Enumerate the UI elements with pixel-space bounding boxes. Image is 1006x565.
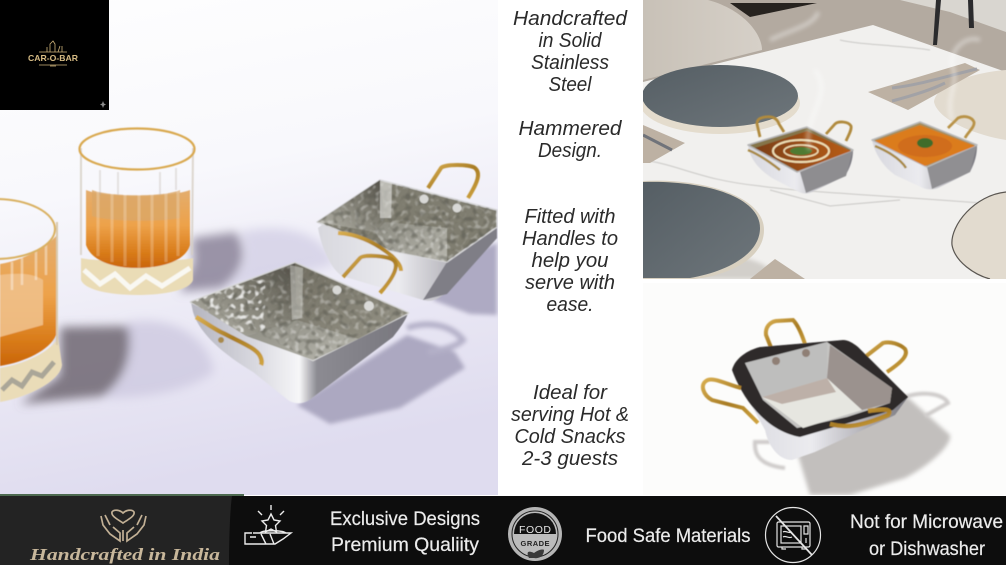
panel: feature text column [498, 0, 643, 496]
plate: cream right [952, 192, 1006, 279]
feature: ideal for serving: 2-3 guests [521, 447, 618, 470]
logo badge [0, 0, 109, 110]
text: food safe materials: Food Safe Materials [586, 525, 751, 547]
handle: rear [766, 320, 805, 350]
icon: food grade badge: GRADE [520, 539, 550, 548]
brand line: handcrafted in india: Handcrafted in India [29, 545, 221, 564]
feature: handcrafted in solid stainless steel: in Solid [538, 29, 602, 52]
whisky glass: front [0, 199, 62, 402]
icon: no microwave [766, 508, 820, 562]
panel: footer strip [0, 494, 1006, 565]
panel: handcrafted in india [0, 496, 232, 565]
feature: hammered design: Hammered [518, 117, 622, 140]
panel: main product photo [0, 118, 498, 495]
icon: food grade badge [508, 507, 562, 561]
logo wordmark: CAR-O-BAR [28, 53, 78, 63]
feature: fitted with handles: ease. [546, 293, 594, 316]
feature: hammered design: Design. [538, 139, 602, 162]
feature: fitted with handles: Handles to [522, 227, 618, 250]
feature: ideal for serving: Cold Snacks [514, 425, 626, 448]
handle: left [703, 380, 758, 423]
logo mark [39, 41, 67, 66]
sparkle [100, 101, 106, 108]
table top [643, 25, 1006, 279]
feature: handcrafted in solid stainless steel: Stainless [531, 51, 609, 74]
handle: right [865, 342, 906, 372]
outer pan [732, 340, 908, 460]
feature: ideal for serving: Ideal for [533, 381, 608, 404]
plate: grey top left [640, 65, 800, 134]
whisky glass: back [80, 128, 194, 295]
cast shadow [755, 394, 950, 495]
steam [770, 12, 980, 150]
inner pan [745, 342, 892, 428]
text: exclusive designs premium quality: Premium Qualiity [331, 534, 479, 556]
curry bowl: left [748, 117, 853, 194]
feature: fitted with handles: Fitted with [524, 205, 616, 228]
feature: fitted with handles: help you [532, 249, 608, 272]
handle: front [830, 410, 889, 426]
feature: handcrafted in solid stainless steel: Steel [548, 73, 593, 96]
icon: star on tray [245, 505, 291, 544]
hammered pan: front [190, 262, 410, 403]
feature: fitted with handles: serve with [525, 271, 615, 294]
text: exclusive designs premium quality: Exclusive Designs [330, 508, 480, 530]
cutlery on napkin [643, 63, 980, 279]
plate: grey bottom left [643, 181, 776, 279]
feature: handcrafted in solid stainless steel: Handcrafted [513, 7, 628, 30]
hammered pan: back [315, 165, 500, 301]
icon: food grade badge: FOOD [519, 524, 551, 536]
text: not for microwave or dishwasher: or Dishwasher [869, 538, 985, 560]
icon: hands holding heart [101, 510, 146, 541]
glass shadows [20, 228, 335, 404]
sofa [643, 0, 762, 80]
panel: dining table photo [640, 0, 1006, 279]
curry bowl: right [872, 117, 977, 189]
text: not for microwave or dishwasher: Not for Microwave [850, 511, 1003, 533]
feature: ideal for serving: serving Hot & [511, 403, 629, 426]
pan shadows [297, 243, 497, 424]
panel: nested pans photo [700, 317, 953, 495]
plate: cream top right [934, 70, 1006, 140]
